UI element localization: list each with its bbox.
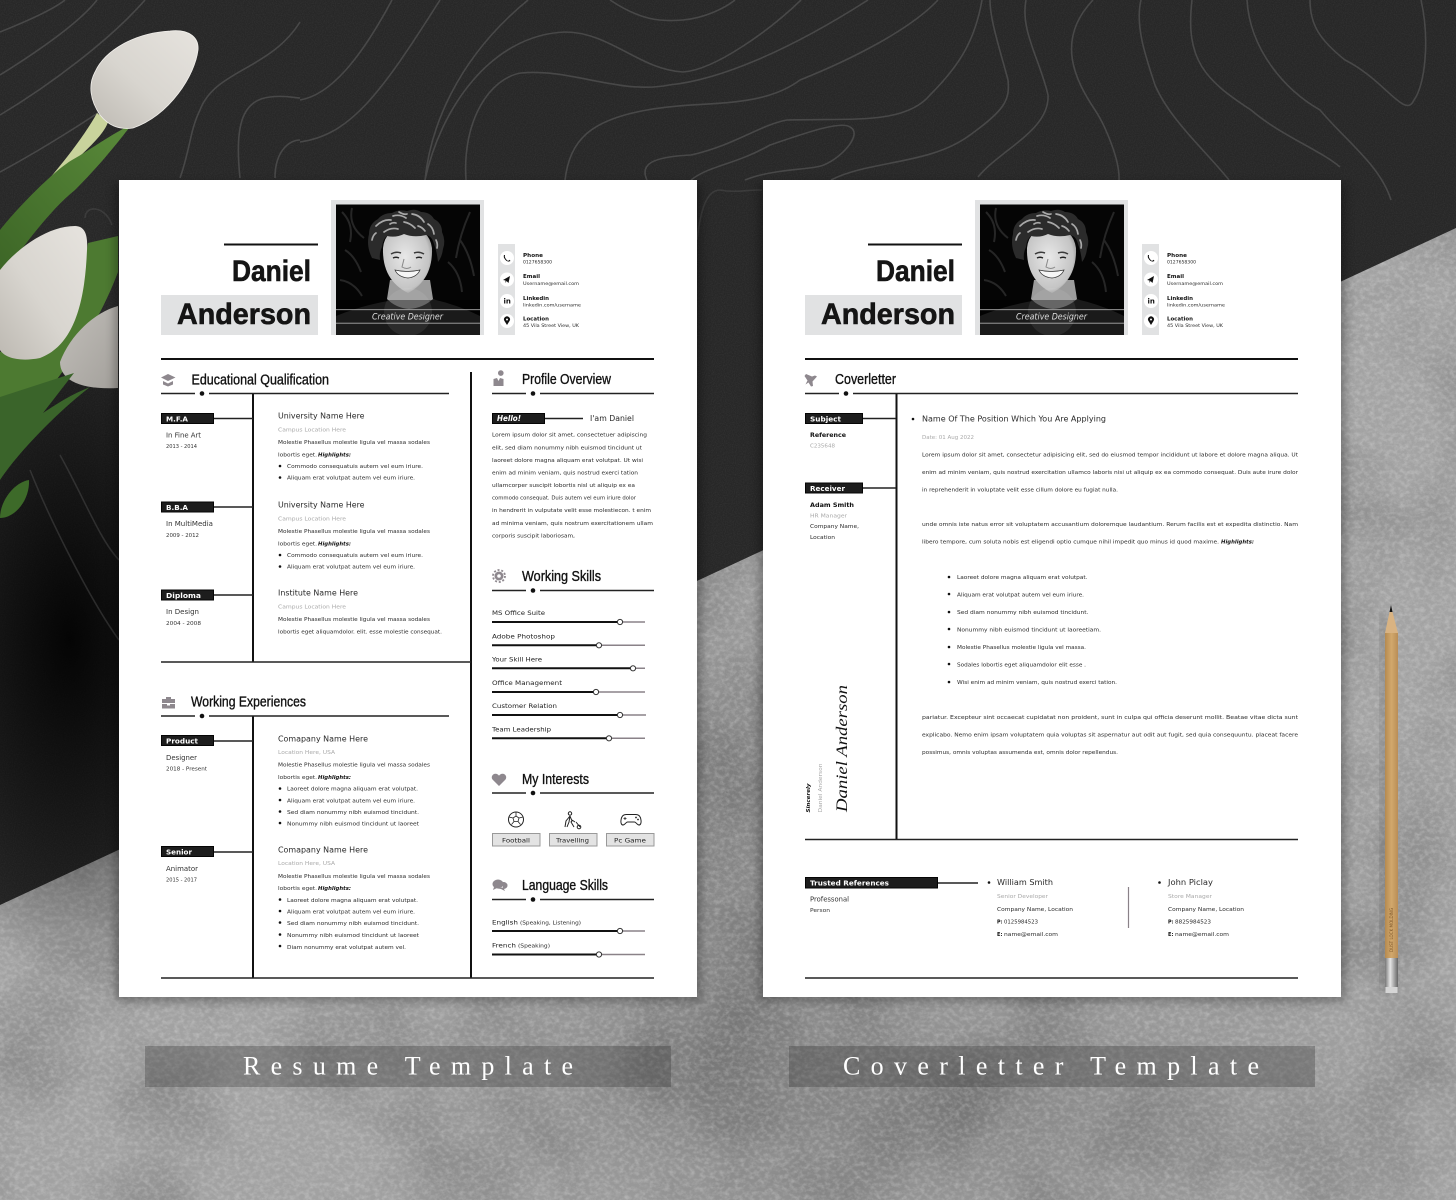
reference: John Piclay: John Piclay bbox=[1167, 878, 1214, 887]
interest: Football: Football bbox=[502, 836, 530, 844]
education entry: M.F.A: Molestie Phasellus molestie ligula vel massa sodales bbox=[278, 440, 430, 446]
coverletter header bbox=[805, 200, 1225, 336]
education entry: B.B.A: 2009 - 2012 bbox=[166, 533, 199, 539]
experience entry: Senior: Senior bbox=[166, 848, 193, 856]
experience entry: Product: 2018 - Present bbox=[166, 766, 207, 772]
decoration: pencil: DUST LOCK MOLDING bbox=[1389, 908, 1394, 952]
skill bars: Adobe Photoshop bbox=[492, 632, 555, 640]
decoration: white tulips bbox=[0, 31, 198, 518]
experience entry: Product: Aliquam erat volutpat autem vel eum iriure. bbox=[287, 798, 415, 804]
experience entry: Product bbox=[162, 734, 430, 828]
education entry: Diploma: Institute Name Here bbox=[278, 588, 358, 598]
experience entry: Product: Product bbox=[166, 738, 199, 746]
reference: William Smith: 0125984523 bbox=[1004, 920, 1038, 926]
skill bars: Customer Relation bbox=[492, 702, 557, 710]
letter body: possimus, omnis voluptas assumenda est, omnis dolor repellendus. bbox=[922, 750, 1118, 756]
interest: Pc Game: Pc Game bbox=[614, 836, 646, 844]
profile text: I'am Daniel bbox=[590, 414, 634, 423]
panel: resume page bbox=[119, 180, 697, 997]
trusted references tag: Person bbox=[810, 908, 830, 914]
reference: William Smith: name@email.com bbox=[1004, 932, 1058, 938]
profile text: corporis suscipit laboriosam, bbox=[492, 533, 575, 539]
contact strip: 45 Vila Street View, UK bbox=[523, 323, 580, 329]
reference: John Piclay: Store Manager bbox=[1168, 894, 1213, 900]
heading: Coverletter bbox=[804, 372, 1298, 396]
sidebar: receiver: Adam Smith bbox=[810, 501, 854, 509]
signature block: Daniel Anderson bbox=[818, 763, 824, 812]
education entry: M.F.A: 2013 - 2014 bbox=[166, 444, 198, 450]
education entry: B.B.A: In MultiMedia bbox=[166, 520, 213, 528]
profile text: in hendrerit in vulputate velit esse molestiecon. t enim bbox=[492, 508, 651, 514]
education entry: Diploma: In Design bbox=[166, 608, 199, 616]
profile text: ullamcorper suscipit lobortis nisl ut aliquip ex ea bbox=[492, 483, 635, 489]
contact strip: Email bbox=[523, 274, 540, 280]
experience entry: Senior: Location Here, USA bbox=[278, 861, 335, 867]
heading: My Interests bbox=[492, 772, 654, 795]
experience entry: Product: lobortis eget. bbox=[278, 775, 317, 781]
caption: Coverletter Template: Coverletter Template bbox=[843, 1052, 1259, 1080]
profile text bbox=[492, 414, 653, 539]
experience entry: Product: Location Here, USA bbox=[278, 750, 335, 756]
profile text: elit, sed diam nonummy nibh euismod tincidunt ut bbox=[492, 445, 643, 451]
experience entry: Senior: Molestie Phasellus molestie ligula vel massa sodales bbox=[278, 874, 430, 880]
letter body: Date: 01 Aug 2022 bbox=[922, 435, 974, 441]
education entry: B.B.A bbox=[162, 500, 430, 571]
letter body: Sed diam nonummy nibh euismod tincidunt. bbox=[957, 610, 1089, 616]
education entry: Diploma: lobortis eget aliquamdolor. elit. esse molestie consequat. bbox=[278, 630, 442, 636]
education entry: Diploma: 2004 - 2008 bbox=[166, 621, 202, 627]
reference: William Smith: Senior Developer bbox=[997, 894, 1049, 900]
reference: William Smith: E: bbox=[997, 932, 1002, 938]
caption: Resume Template bbox=[145, 1046, 671, 1087]
education entry: M.F.A: Commodo consequatuis autem vel eum iriure. bbox=[287, 464, 423, 470]
education entry: M.F.A: Aliquam erat volutpat autem vel eum iriure. bbox=[287, 476, 415, 482]
interest: Football bbox=[492, 812, 540, 846]
sidebar: receiver: Receiver bbox=[810, 485, 846, 493]
trusted references tag: Trusted References bbox=[810, 880, 889, 888]
experience entry: Product: Designer bbox=[166, 754, 197, 762]
letter body: in reprehenderit in voluptate velit esse cillum dolore eu fugiat nulla. bbox=[922, 488, 1118, 494]
caption: Resume Template: Resume Template bbox=[243, 1052, 573, 1080]
language bars: (Speaking, Listening) bbox=[520, 920, 581, 926]
profile text: Lorem ipsum dolor sit amet, consectetuer adipiscing bbox=[492, 433, 647, 439]
contact strip (coverletter): Linkedin bbox=[1167, 296, 1193, 302]
sidebar: subject: C235648 bbox=[810, 444, 835, 450]
contact strip (coverletter): linkedin.com/username bbox=[1167, 302, 1225, 308]
contact strip (coverletter) bbox=[1142, 244, 1225, 335]
sidebar: receiver: Location bbox=[810, 535, 835, 541]
heading: Working Skills: Working Skills bbox=[522, 569, 601, 585]
reference: John Piclay: Company Name, Location bbox=[1168, 907, 1244, 913]
contact strip (coverletter): in bbox=[1148, 298, 1155, 306]
signature block: Daniel Anderson bbox=[834, 685, 851, 813]
letter body: unde omnis iste natus error sit voluptatem accusantium doloremque laudantium. Rerum facilis est et expedita distinctio. Nam bbox=[922, 522, 1298, 528]
letter body: Nonummy nibh euismod tincidunt ut laoreetiam. bbox=[957, 628, 1101, 634]
resume header bbox=[161, 200, 581, 336]
education entry: B.B.A: University Name Here bbox=[278, 500, 365, 510]
contact strip (coverletter): 0127658300 bbox=[1167, 260, 1196, 266]
letter body: explicabo. Nemo enim ipsam voluptatem quia voluptas sit aspernatur aut odit aut fugit, sed quia consequuntu. placeat facere bbox=[922, 732, 1299, 738]
sidebar: receiver bbox=[806, 483, 896, 541]
heading: Profile Overview bbox=[492, 370, 654, 396]
profile text: Hello! bbox=[497, 414, 521, 423]
experience entry: Senior: Highlights: bbox=[318, 886, 351, 892]
language bars: French bbox=[492, 942, 516, 950]
letter body: Sodales lobortis eget aliquamdolor elit esse . bbox=[957, 662, 1086, 668]
experience entry: Senior: Aliquam erat volutpat autem vel eum iriure. bbox=[287, 910, 415, 916]
profile text: commodo consequat. Duis autem vel eum iriure dolor bbox=[492, 496, 637, 502]
education entry: M.F.A: M.F.A bbox=[166, 416, 189, 424]
education entry: B.B.A: Aliquam erat volutpat autem vel eum iriure. bbox=[287, 565, 415, 571]
language bars: English bbox=[492, 918, 518, 926]
reference: William Smith: Company Name, Location bbox=[997, 907, 1073, 913]
reference: John Piclay: E: bbox=[1168, 932, 1174, 938]
letter body: pariatur. Excepteur sint occaecat cupidatat non proident, sunt in culpa qui officia deserunt mollit. Beatae vitae dicta sunt bbox=[922, 715, 1299, 721]
reference: John Piclay: P: bbox=[1168, 920, 1174, 926]
caption: Coverletter Template bbox=[789, 1046, 1315, 1087]
profile text: ad minima veniam, quis nostrum exercitationem ullam bbox=[492, 521, 653, 527]
letter body: Laoreet dolore magna aliquam erat volutpat. bbox=[957, 575, 1088, 581]
contact strip (coverletter): Location bbox=[1167, 316, 1193, 322]
letter body: Highlights: bbox=[1221, 540, 1254, 546]
experience entry: Senior bbox=[162, 846, 430, 951]
reference: John Piclay: name@email.com bbox=[1175, 932, 1229, 938]
experience entry: Senior: Animator bbox=[166, 865, 198, 873]
letter body: libero tempore, cum soluta nobis est eligendi optio cumque nihil impedit quo minus id quod maxime. bbox=[922, 540, 1219, 546]
panel: coverletter page bbox=[763, 180, 1341, 997]
language bars bbox=[492, 918, 645, 957]
photo: Creative Designer bbox=[372, 312, 443, 322]
letter body: Name Of The Position Which You Are Applying bbox=[922, 414, 1106, 424]
education entry: Diploma: Molestie Phasellus molestie ligula vel massa sodales bbox=[278, 617, 430, 623]
skill bars: MS Office Suite bbox=[492, 609, 545, 617]
profile text: enim ad minim veniam, quis nostrud exerci tation bbox=[492, 470, 638, 476]
education entry: M.F.A: Campus Location Here bbox=[278, 428, 347, 434]
experience entry: Product: Sed diam nonummy nibh euismod tincidunt. bbox=[287, 810, 419, 816]
page shadows bbox=[115, 184, 1345, 1001]
heading: Language Skills bbox=[492, 878, 654, 902]
letter body: Wisi enim ad minim veniam, quis nostrud exerci tation. bbox=[957, 680, 1117, 686]
signature block bbox=[806, 685, 851, 813]
contact strip (coverletter): Username@email.com bbox=[1167, 281, 1224, 287]
contact strip: Linkedin bbox=[523, 296, 549, 302]
letter body: Lorem ipsum dolor sit amet, consectetur adipisicing elit, sed do eiusmod tempor incididunt ut labore et dolore magna aliqua. Ut bbox=[922, 452, 1299, 458]
name: Anderson (coverletter): Anderson bbox=[821, 298, 955, 331]
education entry: B.B.A: Commodo consequatuis autem vel eum iriure. bbox=[287, 553, 423, 559]
sidebar: subject bbox=[806, 414, 896, 450]
letter body: Molestie Phasellus molestie ligula vel massa. bbox=[957, 645, 1086, 651]
heading: Educational Qualification: Educational Qualification bbox=[192, 372, 329, 388]
contact strip: Phone bbox=[523, 253, 543, 259]
experience entry: Product: Comapany Name Here bbox=[278, 734, 368, 744]
education entry: M.F.A: lobortis eget. bbox=[278, 452, 317, 458]
education entry: M.F.A: In Fine Art bbox=[166, 432, 201, 440]
contact strip: 0127658300 bbox=[523, 260, 552, 266]
signature block: Sincerely bbox=[806, 783, 812, 812]
heading: My Interests: My Interests bbox=[522, 772, 589, 788]
experience entry: Product: Molestie Phasellus molestie ligula vel massa sodales bbox=[278, 762, 430, 768]
contact strip: linkedin.com/username bbox=[523, 302, 581, 308]
contact strip bbox=[498, 244, 581, 335]
skill bars: Your Skill Here bbox=[491, 656, 542, 664]
experience entry: Product: Highlights: bbox=[318, 775, 351, 781]
photo (coverletter) bbox=[975, 200, 1128, 336]
interest: Pc Game bbox=[606, 814, 654, 846]
reference: John Piclay: 8825984523 bbox=[1175, 920, 1211, 926]
reference: William Smith: William Smith bbox=[997, 878, 1053, 887]
education entry: M.F.A bbox=[162, 412, 430, 482]
profile text: laoreet dolore magna aliquam erat volutpat. Ut wisi bbox=[492, 458, 643, 464]
experience entry: Senior: Sed diam nonummy nibh euismod tincidunt. bbox=[287, 921, 419, 927]
reference: William Smith bbox=[988, 878, 1073, 938]
skill bars bbox=[491, 609, 646, 741]
education entry: B.B.A: lobortis eget. bbox=[278, 542, 317, 548]
sidebar: subject: Subject bbox=[810, 416, 842, 424]
heading: Coverletter: Coverletter bbox=[835, 372, 896, 388]
contact strip (coverletter): Phone bbox=[1167, 253, 1187, 259]
experience entry: Senior: Nonummy nibh euismod tincidunt ut laoreet bbox=[287, 933, 420, 939]
name: Anderson: Anderson bbox=[177, 298, 311, 331]
experience entry: Senior: Diam nonummy erat volutpat autem vel. bbox=[287, 945, 406, 951]
education entry: M.F.A: University Name Here bbox=[278, 412, 365, 420]
heading: Working Skills bbox=[492, 569, 654, 593]
education entry: B.B.A: Molestie Phasellus molestie ligula vel massa sodales bbox=[278, 529, 430, 535]
education entry: B.B.A: Highlights: bbox=[318, 542, 351, 548]
sidebar: receiver: Company Name, bbox=[810, 524, 859, 530]
name: Daniel: Daniel bbox=[232, 255, 311, 288]
contact strip: Location bbox=[523, 316, 549, 322]
reference: John Piclay bbox=[1158, 878, 1244, 938]
education entry: B.B.A: Campus Location Here bbox=[278, 516, 347, 522]
language bars: (Speaking) bbox=[518, 944, 550, 950]
heading: Educational Qualification bbox=[161, 372, 449, 396]
skill bars: Office Management bbox=[492, 679, 563, 687]
photo bbox=[331, 200, 484, 336]
name: Daniel (coverletter): Daniel bbox=[876, 255, 955, 288]
interest: Travelling bbox=[550, 812, 597, 846]
heading: Profile Overview: Profile Overview bbox=[522, 372, 611, 388]
experience entry: Senior: lobortis eget. bbox=[278, 886, 317, 892]
reference: William Smith: P: bbox=[997, 920, 1002, 926]
contact strip: Username@email.com bbox=[523, 281, 580, 287]
heading: Language Skills: Language Skills bbox=[522, 878, 608, 894]
contact strip (coverletter): 45 Vila Street View, UK bbox=[1167, 323, 1224, 329]
experience entry: Product: Nonummy nibh euismod tincidunt ut laoreet bbox=[287, 822, 420, 828]
experience entry: Product: Laoreet dolore magna aliquam erat volutpat. bbox=[287, 787, 418, 793]
experience entry: Senior: Comapany Name Here bbox=[278, 846, 368, 854]
letter body bbox=[912, 414, 1299, 756]
contact strip: in bbox=[504, 298, 511, 306]
education entry: Diploma bbox=[162, 588, 442, 636]
sidebar: receiver: HR Manager bbox=[810, 514, 848, 520]
skill bars: Team Leadership bbox=[491, 726, 551, 734]
heading: Working Experiences: Working Experiences bbox=[191, 694, 306, 710]
contact strip (coverletter): Email bbox=[1167, 274, 1184, 280]
experience entry: Senior: Laoreet dolore magna aliquam erat volutpat. bbox=[287, 898, 418, 904]
heading: Working Experiences bbox=[161, 694, 449, 718]
education entry: B.B.A: B.B.A bbox=[166, 504, 189, 512]
education entry: M.F.A: Highlights: bbox=[318, 452, 351, 458]
letter body: Aliquam erat volutpat autem vel eum iriure. bbox=[957, 592, 1084, 598]
sidebar: subject: Reference bbox=[810, 431, 847, 439]
decoration: pencil bbox=[1380, 605, 1398, 993]
education entry: Diploma: Campus Location Here bbox=[278, 604, 347, 610]
photo (coverletter): Creative Designer bbox=[1016, 312, 1087, 322]
trusted references tag: Professonal bbox=[810, 896, 849, 904]
trusted references tag bbox=[806, 878, 978, 914]
education entry: Diploma: Diploma bbox=[166, 592, 201, 600]
experience entry: Senior: 2015 - 2017 bbox=[166, 878, 197, 884]
letter body: enim ad minim veniam, quis nostrud exercitation ullamco laboris nisi ut aliquip ex ea commodo consequat. Duis aute irure dolor bbox=[922, 470, 1299, 476]
interest: Travelling: Travelling bbox=[555, 836, 589, 844]
